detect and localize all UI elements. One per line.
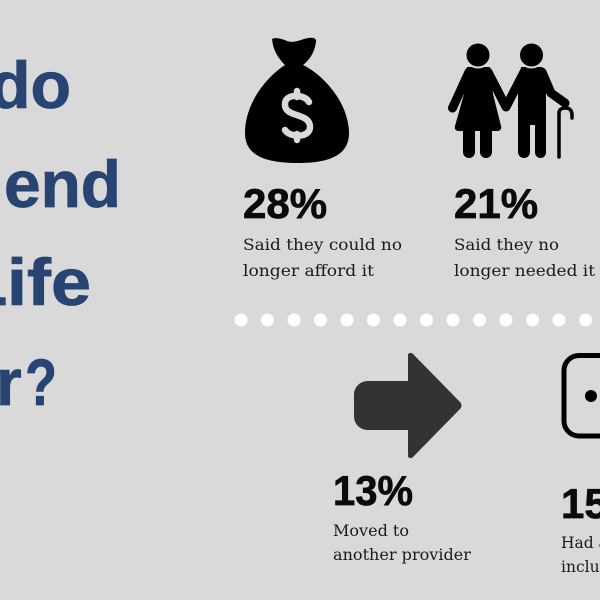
icon: money bag [245,38,349,163]
title: ife [7,245,91,319]
icon: right arrow [354,353,462,458]
stat: 28 percent: Said they could no [243,236,402,254]
title [0,48,121,419]
title: end [4,147,121,221]
stat: 28 percent [243,180,402,280]
stat: 13 percent: Moved to [333,522,409,540]
icon: elderly couple [452,42,572,158]
dotted divider [234,314,592,326]
stat: 15 percent, cropped [561,480,600,576]
icon: rounded square with dot [564,356,600,436]
stat: 21 percent: longer needed it [454,262,596,280]
stat: 28 percent: 28% [243,180,327,227]
stat: 21 percent [454,180,596,280]
title: ? [25,345,57,419]
stat: 13 percent: another provider [333,546,472,564]
stat: 21 percent: 21% [454,180,538,227]
stat: 28 percent: longer afford it [243,262,375,280]
stat: 13 percent [333,467,472,564]
stat: 21 percent: Said they no [454,236,559,254]
stat: 13 percent: 13% [333,467,413,514]
